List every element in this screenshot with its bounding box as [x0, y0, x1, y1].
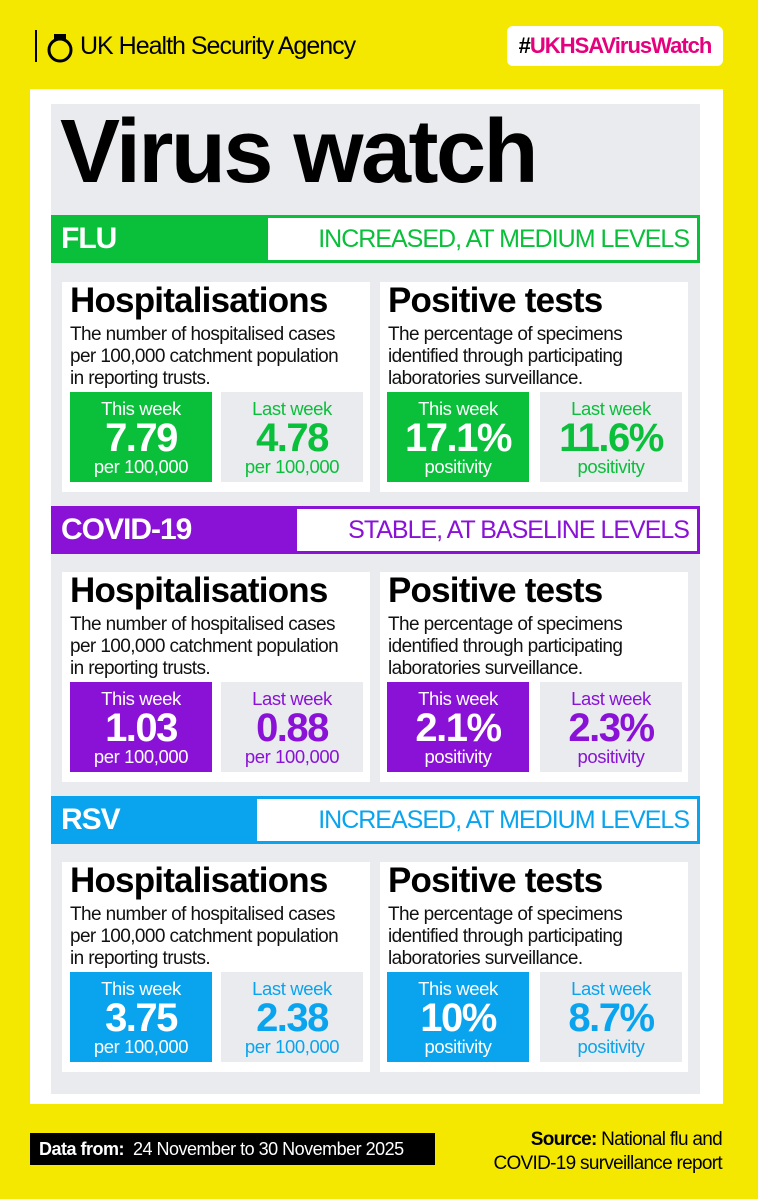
- panel: covid hospitalisations: [62, 572, 370, 782]
- panel: flu positive tests: positivity: [425, 456, 491, 477]
- panel: covid positive tests: positivity: [425, 746, 491, 767]
- panel: rsv hospitalisations: [62, 862, 370, 1072]
- section: rsv header: RSV: [61, 803, 120, 836]
- panel: rsv positive tests: identified through participating: [388, 926, 622, 947]
- panel: flu hospitalisations: in reporting trusts.: [70, 368, 210, 389]
- section: flu header: [51, 215, 700, 263]
- panel: rsv hospitalisations: 2.38: [256, 996, 328, 1040]
- panel: covid hospitalisations: 1.03: [105, 706, 177, 750]
- panel: flu positive tests: Positive tests: [388, 281, 602, 320]
- source: Source: National flu and: [531, 1129, 722, 1150]
- section: covid header: COVID-19: [61, 513, 191, 546]
- panel: flu hospitalisations: [62, 282, 370, 492]
- panel: covid hospitalisations: in reporting trusts.: [70, 658, 210, 679]
- panel: covid hospitalisations: Hospitalisations: [70, 571, 328, 610]
- panel: rsv positive tests: Last week: [571, 978, 651, 999]
- panel: flu hospitalisations: Hospitalisations: [70, 281, 328, 320]
- source: [493, 1129, 722, 1174]
- panel: flu positive tests: Last week: [571, 398, 651, 419]
- header logo: UK Health Security Agency: [80, 32, 355, 60]
- panel: covid hospitalisations: This week: [101, 688, 181, 709]
- section: flu header: FLU: [61, 222, 116, 255]
- panel: rsv hospitalisations: Last week: [252, 978, 332, 999]
- panel: covid positive tests: This week: [418, 688, 498, 709]
- section: rsv header: INCREASED, AT MEDIUM LEVELS: [318, 806, 689, 834]
- panel: covid hospitalisations: 0.88: [256, 706, 328, 750]
- panel: flu positive tests: [380, 282, 688, 492]
- panel: flu hospitalisations: per 100,000 catchment population: [70, 346, 338, 367]
- panel: flu hospitalisations: Last week: [252, 398, 332, 419]
- panel: rsv hospitalisations: Hospitalisations: [70, 861, 328, 900]
- panel: flu positive tests: This week: [418, 398, 498, 419]
- panel: flu positive tests: The percentage of specimens: [388, 324, 622, 345]
- panel: flu hospitalisations: 7.79: [105, 416, 177, 460]
- panel: rsv hospitalisations: per 100,000: [245, 1036, 339, 1057]
- panel: covid hospitalisations: Last week: [252, 688, 332, 709]
- panel: flu hospitalisations: 4.78: [256, 416, 328, 460]
- panel: rsv positive tests: positivity: [578, 1036, 644, 1057]
- panel: covid positive tests: Last week: [571, 688, 651, 709]
- panel: rsv positive tests: 8.7%: [568, 996, 654, 1040]
- panel: rsv hospitalisations: This week: [101, 978, 181, 999]
- panel: flu positive tests: 17.1%: [405, 416, 511, 460]
- section: flu header: INCREASED, AT MEDIUM LEVELS: [318, 225, 689, 253]
- panel: flu hospitalisations: per 100,000: [245, 456, 339, 477]
- panel: covid hospitalisations: per 100,000 catchment population: [70, 636, 338, 657]
- panel: flu hospitalisations: The number of hospitalised cases: [70, 324, 335, 345]
- panel: covid positive tests: identified through participating: [388, 636, 622, 657]
- panel: covid positive tests: 2.1%: [415, 706, 501, 750]
- panel: flu positive tests: positivity: [578, 456, 644, 477]
- section: rsv header: [51, 796, 700, 844]
- panel: rsv positive tests: This week: [418, 978, 498, 999]
- data from label: Data from: 24 November to 30 November 2025: [39, 1139, 404, 1159]
- hashtag badge: [507, 26, 723, 66]
- title: Virus watch: [60, 102, 536, 202]
- panel: flu positive tests: identified through participating: [388, 346, 622, 367]
- panel: rsv positive tests: 10%: [420, 996, 496, 1040]
- data from label: [30, 1133, 435, 1165]
- panel: covid positive tests: Positive tests: [388, 571, 602, 610]
- panel: flu positive tests: 11.6%: [559, 416, 663, 460]
- panel: rsv hospitalisations: 3.75: [105, 996, 177, 1040]
- panel: rsv hospitalisations: in reporting trusts.: [70, 948, 210, 969]
- source: COVID-19 surveillance report: [493, 1153, 722, 1174]
- panel: flu hospitalisations: This week: [101, 398, 181, 419]
- panel: rsv positive tests: The percentage of specimens: [388, 904, 622, 925]
- panel: covid hospitalisations: The number of hospitalised cases: [70, 614, 335, 635]
- panel: rsv positive tests: positivity: [425, 1036, 491, 1057]
- panel: rsv hospitalisations: per 100,000 catchment population: [70, 926, 338, 947]
- section: covid header: STABLE, AT BASELINE LEVELS: [348, 516, 689, 544]
- panel: covid positive tests: [380, 572, 688, 782]
- panel: covid positive tests: laboratories surveillance.: [388, 658, 583, 679]
- panel: rsv positive tests: laboratories surveillance.: [388, 948, 583, 969]
- panel: rsv positive tests: Positive tests: [388, 861, 602, 900]
- section: covid header: [51, 506, 700, 554]
- panel: rsv positive tests: [380, 862, 688, 1072]
- main panel: [30, 89, 723, 1104]
- panel: rsv hospitalisations: The number of hospitalised cases: [70, 904, 335, 925]
- panel: flu hospitalisations: per 100,000: [94, 456, 188, 477]
- panel: covid hospitalisations: per 100,000: [94, 746, 188, 767]
- panel: rsv hospitalisations: per 100,000: [94, 1036, 188, 1057]
- panel: covid hospitalisations: per 100,000: [245, 746, 339, 767]
- panel: covid positive tests: The percentage of specimens: [388, 614, 622, 635]
- panel: covid positive tests: 2.3%: [568, 706, 654, 750]
- panel: flu positive tests: laboratories surveillance.: [388, 368, 583, 389]
- hashtag badge: #UKHSAVirusWatch: [519, 33, 711, 58]
- panel: covid positive tests: positivity: [578, 746, 644, 767]
